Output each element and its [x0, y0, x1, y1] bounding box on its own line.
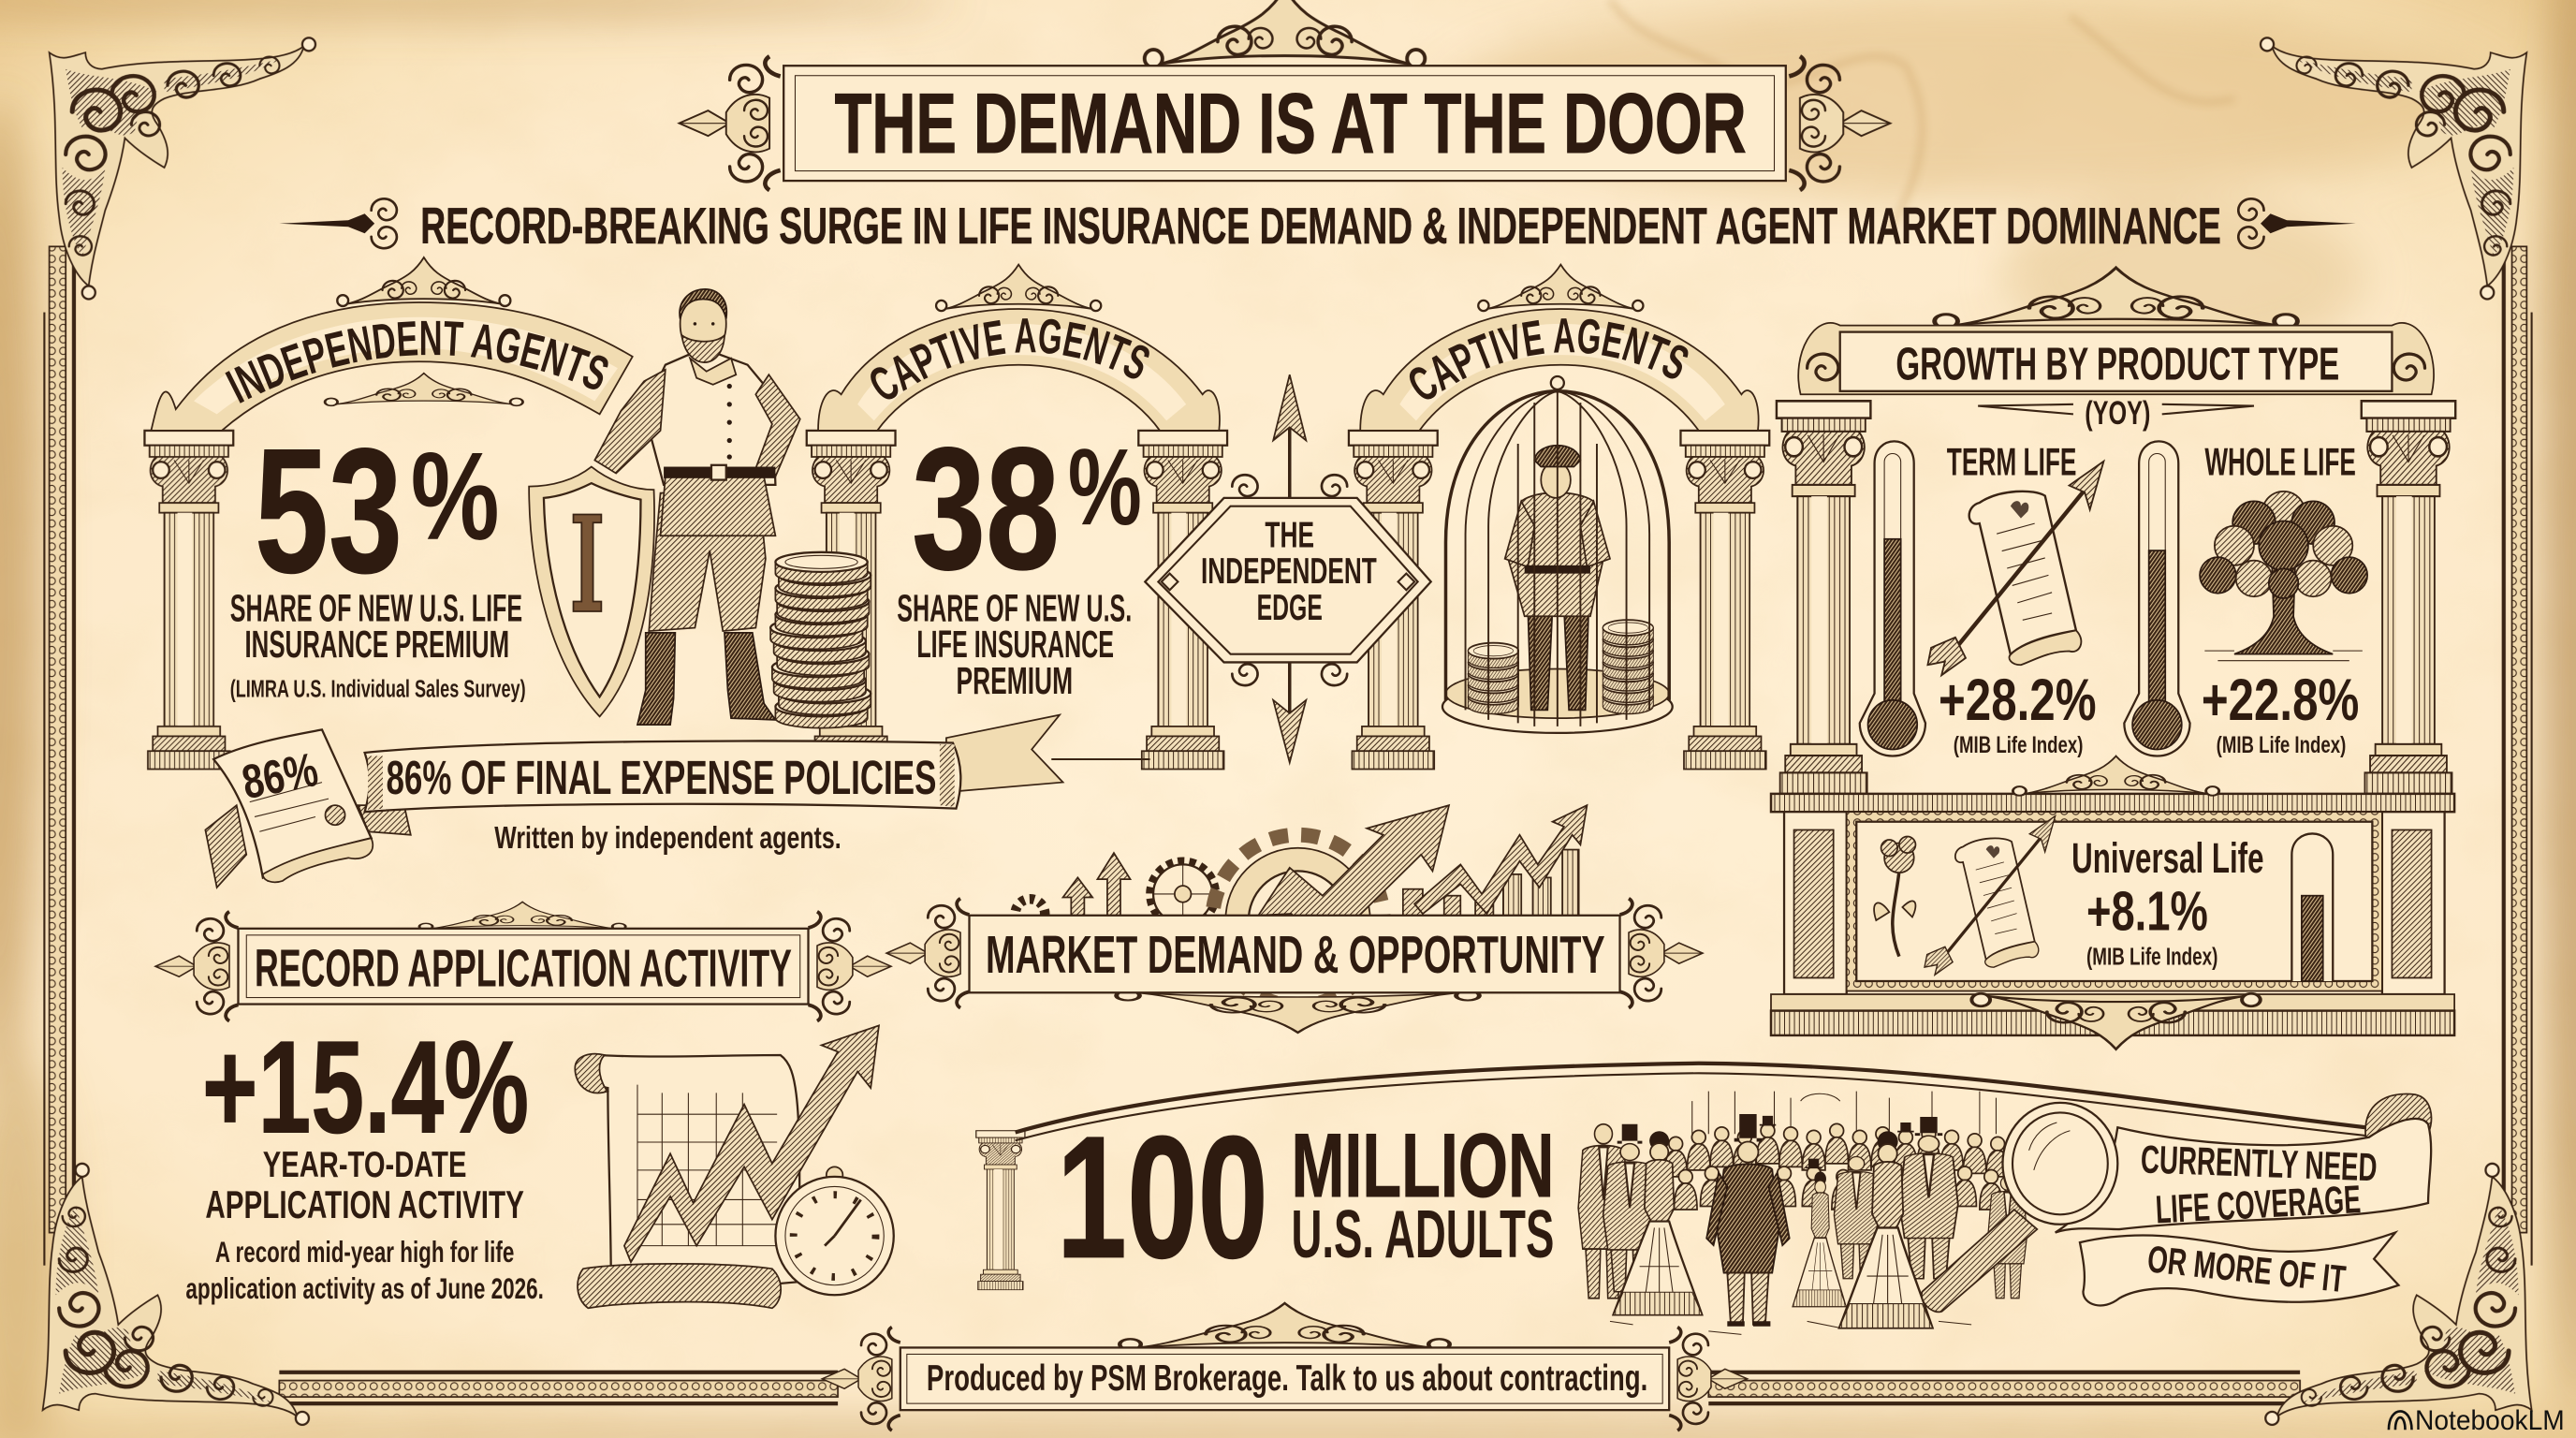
heading plaque: record application activity	[155, 902, 891, 1021]
heading plaque: market demand and opportunity with icons	[886, 805, 1703, 1033]
stat: 53 percent: %	[411, 427, 500, 566]
the independent edge sign with arrows: INDEPENDENT	[1201, 551, 1377, 592]
stat: plus 15.4 percent: +15.4%	[202, 1013, 529, 1160]
icon: certificate scroll	[205, 729, 373, 888]
panel: captive agents in cage	[1348, 263, 1771, 770]
heading plaque: record application activity: RECORD APPLICATION ACTIVITY	[255, 938, 792, 997]
arch banner: captive agents: CAPTIVE AGENTS	[1410, 318, 1689, 399]
text: whole life	[2202, 439, 2359, 758]
text: year to date application activity	[185, 1145, 544, 1305]
thermometer: term life	[1860, 441, 1925, 756]
banner: currently need life coverage: LIFE COVERAGE	[2155, 1177, 2362, 1232]
illustration: rising chart scroll and stopwatch	[575, 1025, 894, 1308]
text: year to date application activity: A record mid-year high for life	[215, 1235, 514, 1269]
illustration: crowd of people	[1578, 1092, 2027, 1334]
text: term life: TERM LIFE	[1947, 439, 2076, 483]
icon: flower	[1874, 837, 1915, 957]
title plaque	[680, 0, 1890, 190]
lower frame: universal life	[1771, 756, 2454, 1049]
arch banner: independent agents: INDEPENDENT AGENTS	[225, 320, 608, 404]
text: share of premium: INSURANCE PREMIUM	[245, 623, 509, 666]
label: yoy: (YOY)	[2085, 395, 2150, 432]
panel: 100 million u.s. adults	[976, 1064, 2431, 1334]
text: term life: +28.2%	[1939, 668, 2097, 733]
stat: 38 percent: 38	[912, 412, 1060, 606]
text: whole life: WHOLE LIFE	[2204, 439, 2356, 483]
banner: 86 percent of final expense	[205, 715, 1150, 888]
text: year to date application activity: APPLICATION ACTIVITY	[205, 1182, 524, 1226]
text: whole life: (MIB Life Index)	[2217, 733, 2346, 758]
thermometer: whole life	[2124, 441, 2190, 756]
stat: 100 million: U.S. ADULTS	[1292, 1197, 1554, 1272]
the independent edge sign with arrows: EDGE	[1257, 588, 1323, 628]
text: term life: (MIB Life Index)	[1954, 733, 2083, 758]
text: universal life: Universal Life	[2071, 834, 2264, 882]
notebooklm watermark: NotebookLM	[2415, 1405, 2565, 1436]
icon: oak tree	[2200, 492, 2367, 661]
banner: or more of it: OR MORE OF IT	[2145, 1237, 2348, 1300]
text: share of premium: (LIMRA U.S. Individual Sales Survey)	[230, 674, 526, 702]
arch banner: captive agents	[1348, 263, 1771, 770]
banner: 86 percent of final expense: 86% OF FINAL EXPENSE POLICIES	[386, 751, 936, 804]
label: yoy	[1978, 395, 2254, 432]
icon: policy scroll with arrow	[1927, 462, 2103, 675]
the independent edge sign with arrows: THE	[1265, 516, 1314, 556]
stat: 38 percent: %	[1068, 426, 1142, 548]
icon: policy scroll with arrow	[1925, 816, 2056, 975]
text: share of premium	[230, 587, 526, 702]
arch banner: captive agents	[769, 263, 1228, 807]
text: share of premium	[897, 587, 1132, 702]
illustration: independent agent with shield and coins	[529, 289, 871, 728]
thermometer: universal life	[2291, 833, 2333, 981]
text: share of premium: SHARE OF NEW U.S.	[897, 587, 1132, 630]
text: whole life: +22.8%	[2202, 668, 2359, 733]
text: share of premium: PREMIUM	[956, 659, 1073, 702]
banner: currently need life coverage	[2056, 1094, 2431, 1233]
stat: 100 million: 100	[1057, 1101, 1268, 1295]
panel: independent agents	[143, 256, 670, 807]
heading plaque: market demand and opportunity with icons: MARKET DEMAND & OPPORTUNITY	[986, 925, 1605, 984]
stat: 100 million: MILLION	[1292, 1116, 1554, 1216]
caption: written by independent agents: Written by independent agents.	[494, 821, 842, 856]
banner: currently need life coverage: CURRENTLY NEED	[2140, 1137, 2378, 1189]
arch banner: independent agents	[143, 256, 670, 807]
banner: or more of it	[2080, 1233, 2398, 1305]
footer plaque	[822, 1303, 1748, 1431]
icons: gears arrows and bars	[1016, 805, 1587, 1005]
heading: growth by product type: GROWTH BY PRODUCT TYPE	[1895, 340, 2339, 390]
text: universal life: +8.1%	[2086, 880, 2208, 943]
icon: certificate scroll: 86%	[238, 742, 322, 809]
panel: captive agents	[805, 263, 1228, 770]
heading: growth by product type	[1798, 268, 2434, 394]
stat: 53 percent: 53	[255, 412, 402, 610]
stat: 100 million	[1057, 1101, 1554, 1295]
text: year to date application activity: application activity as of June 2026.	[185, 1271, 544, 1305]
illustration: agent in cage	[1442, 376, 1673, 733]
title plaque: THE DEMAND IS AT THE DOOR	[835, 76, 1747, 171]
icon: magnifying glass	[1922, 1103, 2117, 1312]
text: universal life	[2071, 834, 2264, 970]
text: year to date application activity: YEAR-TO-DATE	[263, 1145, 466, 1185]
footer plaque: Produced by PSM Brokerage. Talk to us about contracting.	[927, 1358, 1647, 1399]
text: share of premium: SHARE OF NEW U.S. LIFE	[230, 587, 522, 630]
panel: growth by product type	[1771, 268, 2455, 1049]
text: universal life: (MIB Life Index)	[2086, 942, 2217, 970]
text: share of premium: LIFE INSURANCE	[916, 623, 1114, 666]
arch banner: captive agents: CAPTIVE AGENTS	[871, 318, 1149, 399]
text: term life	[1939, 439, 2097, 758]
the independent edge sign with arrows	[1145, 374, 1431, 763]
arc and small column	[976, 1064, 2365, 1290]
